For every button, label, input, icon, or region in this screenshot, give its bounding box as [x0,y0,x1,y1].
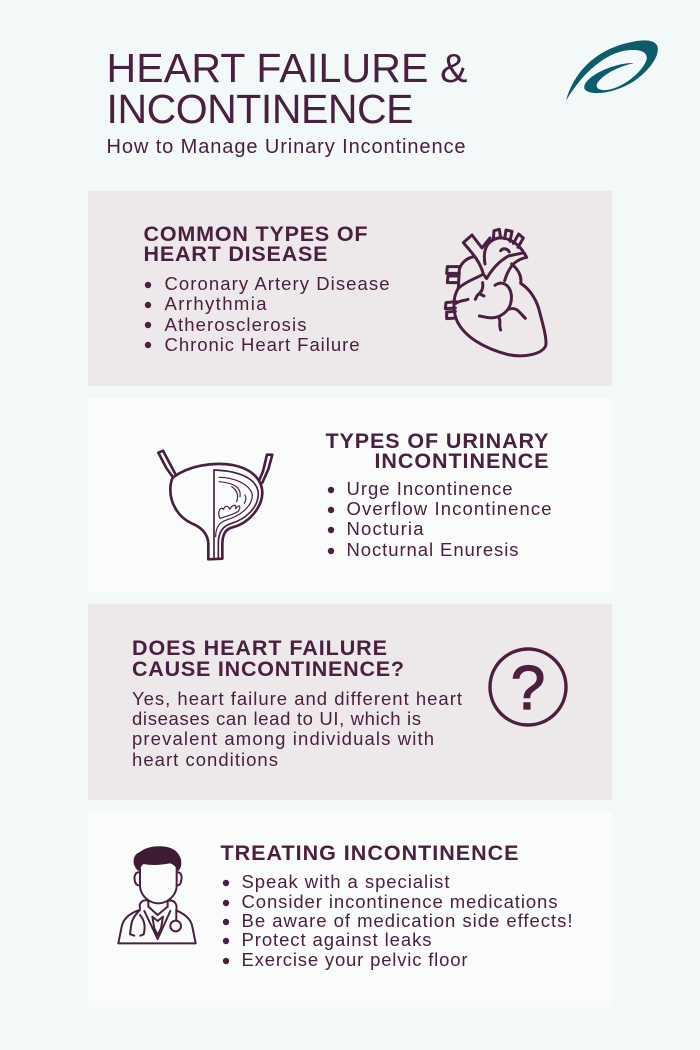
panel: common types of heart disease [88,191,612,386]
text block: explanation [132,688,462,770]
icon: logo swoosh [566,40,658,101]
text block: explanation: heart conditions [132,749,278,770]
subtitle: How to Manage Urinary Incontinence [106,136,466,158]
list: heart disease types [145,273,390,355]
list: heart disease types: Atherosclerosis [164,314,306,335]
heading: common types: HEART DISEASE [144,242,328,266]
list: urinary incontinence types [328,478,552,560]
title: HEART FAILURE & [106,45,468,91]
heading: common types: COMMON TYPES OF [144,222,368,246]
text block: explanation: prevalent among individuals with [132,728,434,749]
list: urinary incontinence types: Nocturnal Enuresis [346,539,518,560]
icon: question mark in circle [490,649,566,725]
list: urinary incontinence types: Nocturia [346,518,424,539]
panel: does heart failure cause incontinence [88,604,612,800]
header: title and subtitle [106,45,468,158]
panel: types of urinary incontinence [88,398,612,593]
list: treatments [223,871,573,970]
heading: does heart failure cause incontinence [132,636,404,681]
heading: does heart failure cause incontinence: CAUSE INCONTINENCE? [132,657,404,681]
list: treatments: Consider incontinence medications [242,891,558,912]
icon: question mark in circle: ? [511,654,545,723]
list: treatments: Speak with a specialist [242,871,450,892]
heading: urinary types: TYPES OF URINARY [326,429,548,453]
text block: explanation: diseases can lead to UI, which is [132,708,421,729]
list: treatments: Protect against leaks [242,929,432,950]
heading: common types [144,222,368,266]
icon: anatomical heart [445,229,546,356]
title [106,45,468,132]
list: treatments: Exercise your pelvic floor [242,949,468,970]
text block: explanation: Yes, heart failure and different heart [132,688,462,709]
heading: treating incontinence: TREATING INCONTINENCE [220,841,518,865]
icon: bladder cross-section [158,451,272,559]
list: urinary incontinence types: Urge Incontinence [346,478,512,499]
heading: urinary types: INCONTINENCE [374,449,548,473]
list: heart disease types: Chronic Heart Failure [164,334,360,355]
list: treatments: Be aware of medication side effects! [242,910,572,931]
heading: urinary types [326,429,548,473]
title: INCONTINENCE [106,86,414,132]
panel: treating incontinence [88,812,612,1007]
list: heart disease types: Arrhythmia [164,293,267,314]
heading: does heart failure cause incontinence: DOES HEART FAILURE [132,636,387,660]
list: urinary incontinence types: Overflow Incontinence [346,498,552,519]
icon: doctor with stethoscope [118,847,196,943]
list: heart disease types: Coronary Artery Disease [164,273,390,294]
